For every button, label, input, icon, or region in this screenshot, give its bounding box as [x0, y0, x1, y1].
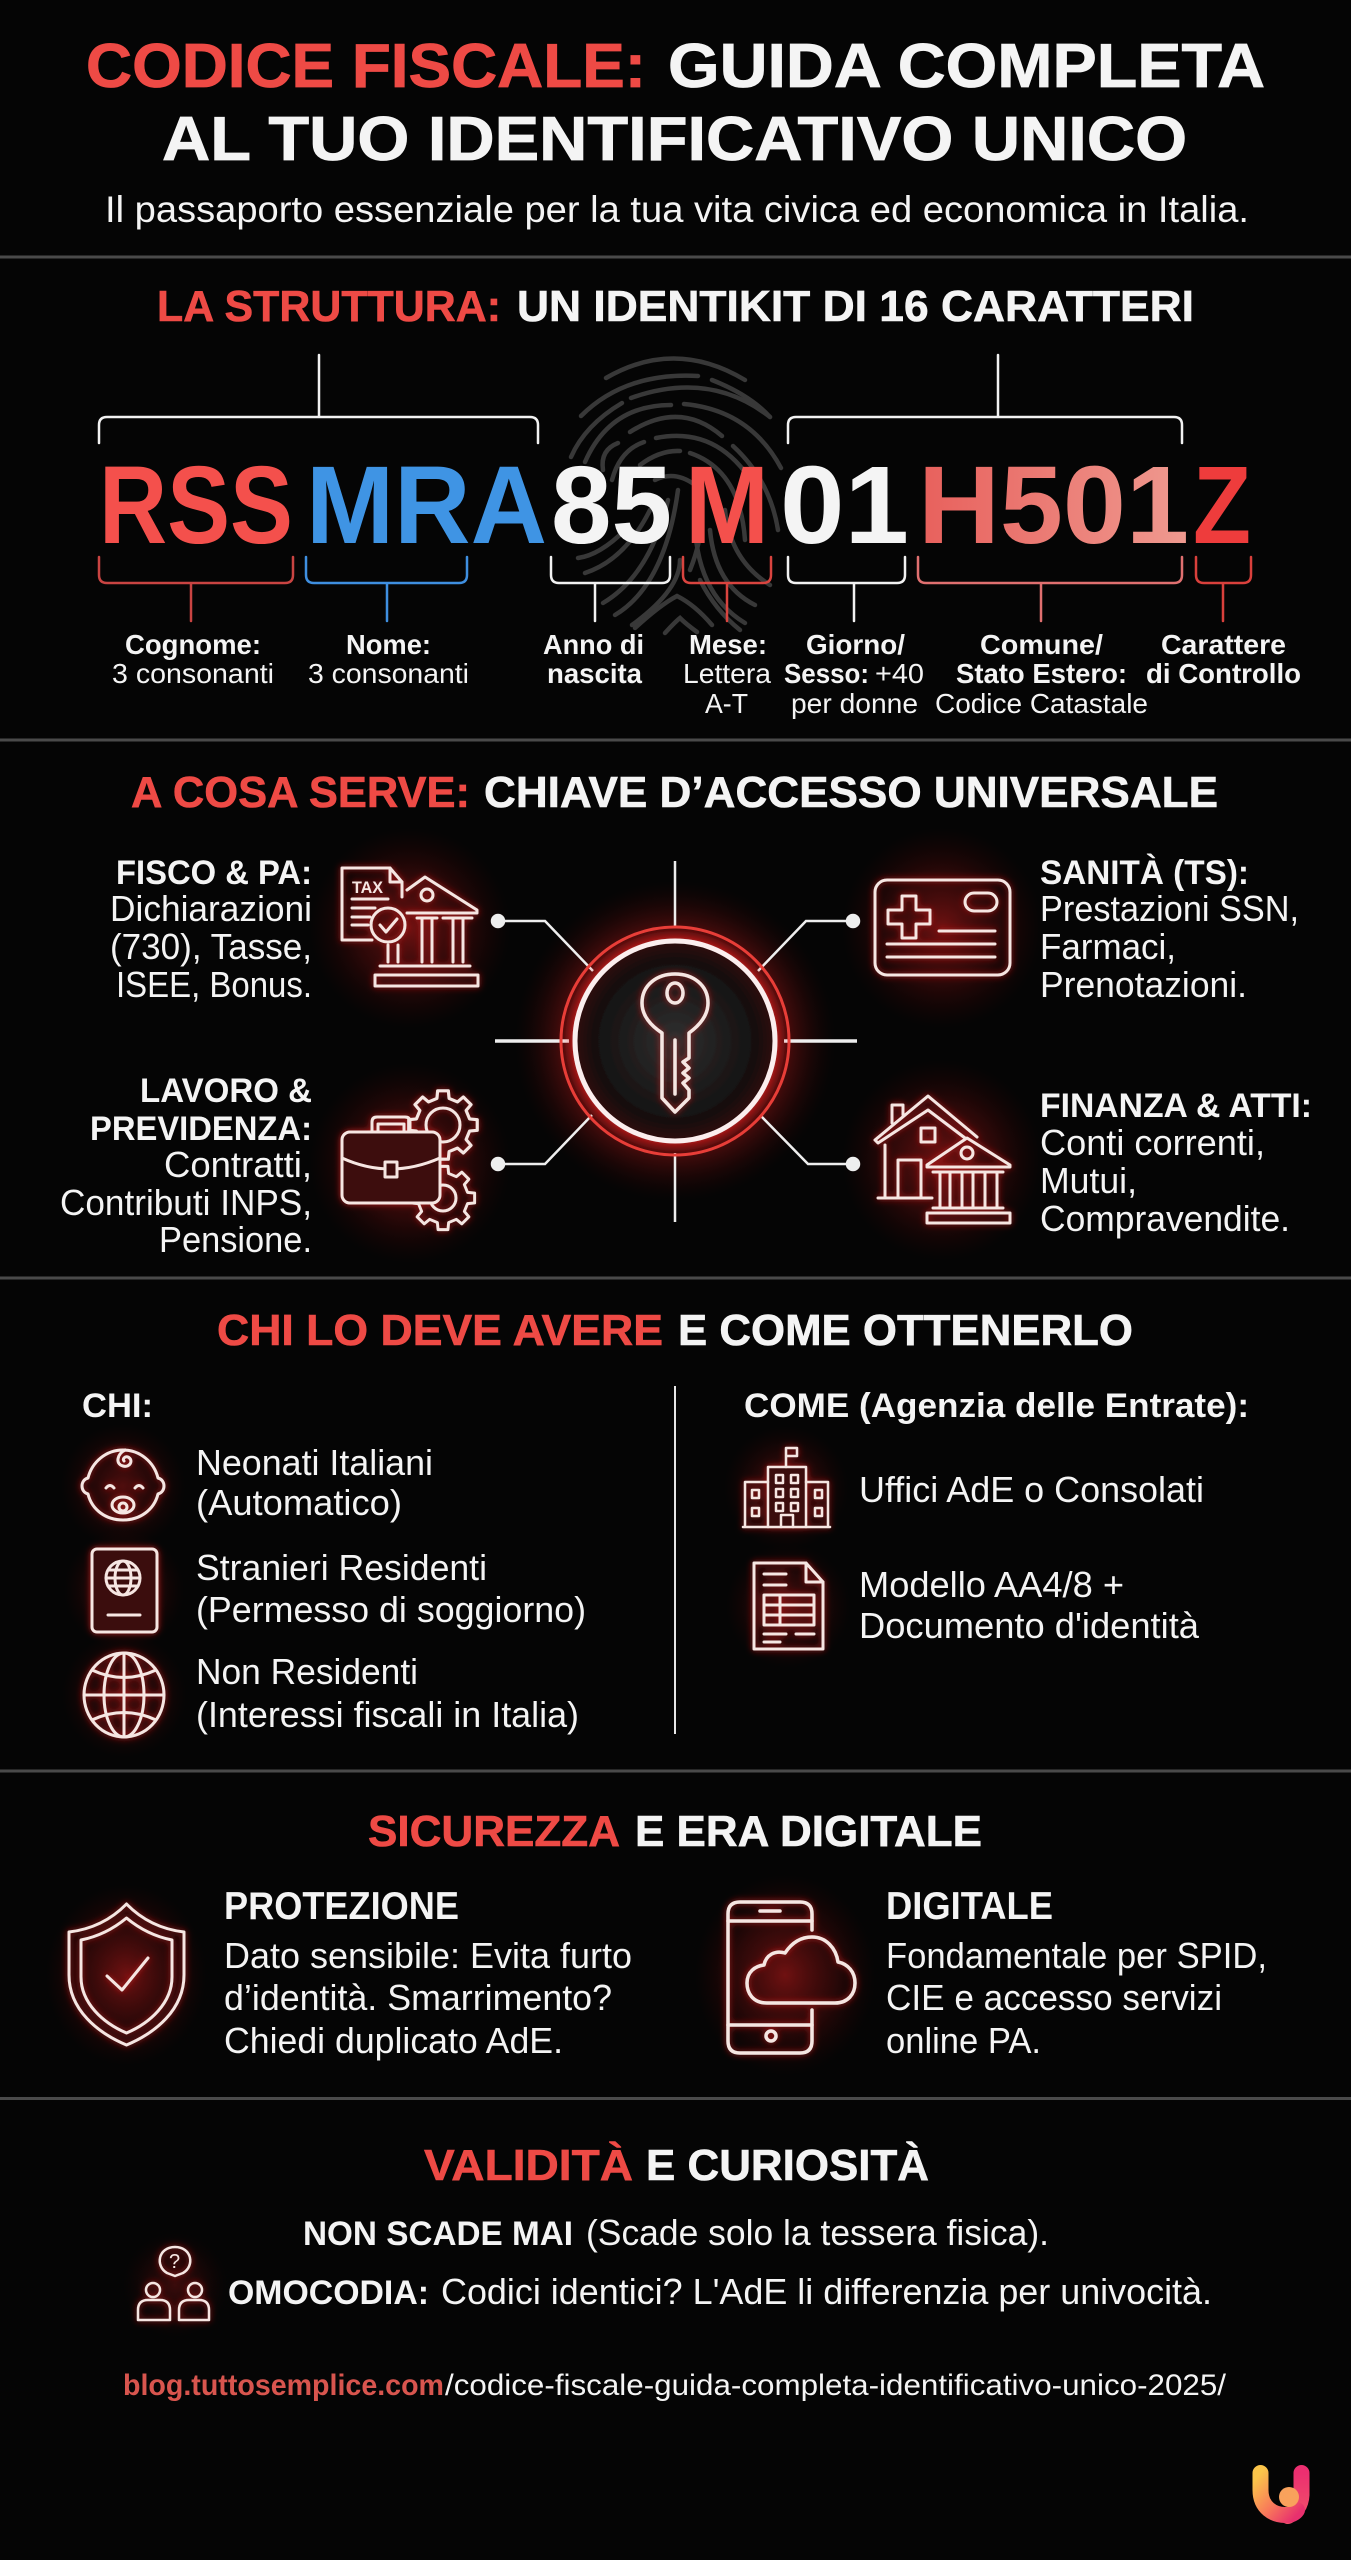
text: neonati: (Automatico)	[196, 1482, 402, 1523]
label: giorno sesso: +40	[875, 658, 924, 689]
text: modello	[859, 1564, 1200, 1646]
label: nome	[308, 629, 469, 689]
label: mese: Mese:	[689, 629, 767, 660]
text: finanza e atti: FINANZA & ATTI:	[1040, 1087, 1312, 1125]
subtitle: Il passaporto essenziale per la tua vita civica ed economica in Italia.	[105, 189, 1249, 230]
text: lavoro e previdenza: PREVIDENZA:	[90, 1110, 312, 1148]
text: sanita: Prestazioni SSN,	[1040, 888, 1299, 929]
text: sanita: SANITÀ (TS):	[1040, 854, 1249, 892]
label: controllo: di Controllo	[1146, 658, 1301, 689]
icon glow backgrounds	[310, 828, 1042, 1263]
heading: sicurezza: SICUREZZA	[368, 1807, 620, 1856]
text: stranieri: (Permesso di soggiorno)	[196, 1589, 586, 1630]
bracket: anno	[551, 557, 670, 621]
outer red ring	[561, 927, 789, 1155]
bracket: controllo	[1196, 557, 1251, 621]
label: comune: Stato Estero:	[956, 658, 1127, 689]
text: digitale: Fondamentale per SPID,	[886, 1935, 1267, 1976]
label: mese: A-T	[705, 688, 748, 719]
code string	[99, 444, 1251, 567]
text: digitale	[886, 1885, 1267, 2061]
text: omocodia: Codici identici? L'AdE li differenzia per univocità.	[441, 2271, 1212, 2312]
text: omocodia: OMOCODIA:	[228, 2274, 429, 2312]
code string: MRA	[306, 444, 547, 567]
label: controllo: Carattere	[1161, 629, 1286, 660]
title	[86, 32, 1265, 174]
text: source link: blog.tuttosemplice.com	[123, 2369, 444, 2402]
connectors	[492, 861, 859, 1222]
text: protezione	[224, 1885, 632, 2061]
bracket: comune	[918, 557, 1182, 621]
heading: validita: VALIDITÀ	[424, 2140, 633, 2190]
label: anno: nascita	[547, 658, 642, 689]
code string: M	[685, 444, 769, 567]
icon: phone cloud	[695, 1875, 875, 2075]
top bracket: cognome nome	[99, 355, 538, 443]
icon: shield	[46, 1885, 206, 2065]
code string: Z	[1193, 444, 1251, 567]
title: AL TUO IDENTIFICATIVO UNICO	[162, 105, 1187, 174]
text: fisco e pa: ISEE, Bonus.	[116, 964, 312, 1005]
code string: RSS	[99, 444, 293, 567]
text: uffici: Uffici AdE o Consolati	[859, 1469, 1204, 1510]
text: modello: Documento d'identità	[859, 1605, 1200, 1646]
text: fisco e pa: FISCO & PA:	[116, 854, 312, 892]
panel: a cosa serve	[60, 768, 1312, 1263]
text: finanza e atti: Conti correnti,	[1040, 1122, 1265, 1163]
code string: 85	[551, 444, 672, 567]
text: non scade mai: (Scade solo la tessera fisica).	[586, 2212, 1049, 2253]
label: comune: Codice Catastale	[935, 688, 1148, 719]
icon: omocodia	[123, 2233, 227, 2337]
text: protezione: d’identità. Smarrimento?	[224, 1977, 612, 2018]
bracket: nome	[306, 557, 467, 621]
heading: la struttura	[157, 282, 1194, 331]
text: stranieri: Stranieri Residenti	[196, 1547, 487, 1588]
icon: tax and bank	[342, 868, 478, 986]
title: GUIDA COMPLETA	[668, 32, 1265, 101]
text: digitale: CIE e accesso servizi	[886, 1977, 1222, 2018]
graphic: central key	[492, 861, 859, 1222]
text: source link: /codice-fiscale-guida-completa-identificativo-unico-2025/	[445, 2369, 1227, 2402]
icon: baby	[82, 1450, 164, 1520]
heading: sicurezza	[368, 1807, 982, 1856]
heading: sicurezza: E ERA DIGITALE	[635, 1807, 982, 1856]
label: mese: Lettera	[683, 658, 771, 689]
label: cognome: Cognome:	[125, 629, 261, 660]
code string: H501	[918, 444, 1189, 567]
heading: la struttura: LA STRUTTURA:	[157, 282, 501, 331]
panel: sicurezza	[46, 1807, 1267, 2075]
label: comune	[935, 629, 1148, 719]
panel: struttura	[99, 282, 1301, 719]
panel: validita	[123, 2140, 1227, 2402]
text: neonati: Neonati Italiani	[196, 1442, 433, 1483]
logo	[1260, 2473, 1302, 2516]
label: giorno sesso: per donne	[791, 688, 918, 719]
heading: come: COME (Agenzia delle Entrate):	[744, 1387, 1249, 1425]
label: giorno sesso	[784, 629, 924, 719]
label: mese	[683, 629, 771, 719]
text: modello: Modello AA4/8 +	[859, 1564, 1124, 1605]
text: fisco e pa	[110, 854, 312, 1005]
text: lavoro e previdenza: Pensione.	[159, 1219, 312, 1260]
text: lavoro e previdenza: Contratti,	[164, 1144, 312, 1185]
text: lavoro e previdenza: LAVORO &	[140, 1072, 312, 1110]
heading: chi: CHI:	[82, 1387, 153, 1425]
heading: a cosa serve: A COSA SERVE:	[131, 768, 470, 817]
icon: tax and bank: TAX	[352, 878, 384, 897]
text: digitale: DIGITALE	[886, 1885, 1053, 1928]
heading: la struttura: UN IDENTIKIT DI 16 CARATTERI	[517, 282, 1194, 331]
heading: a cosa serve: CHIAVE D’ACCESSO UNIVERSALE	[484, 768, 1218, 817]
text: protezione: Chiedi duplicato AdE.	[224, 2020, 563, 2061]
heading: chi lo deve avere: CHI LO DEVE AVERE	[217, 1306, 663, 1355]
text: neonati	[196, 1442, 433, 1523]
text: fisco e pa: (730), Tasse,	[110, 926, 312, 967]
label: comune: Comune/	[980, 629, 1103, 660]
bracket: cognome	[99, 557, 293, 621]
text: protezione: Dato sensibile: Evita furto	[224, 1935, 632, 1976]
text: non scade mai: NON SCADE MAI	[303, 2215, 573, 2253]
bracket: mese	[683, 557, 771, 621]
text: stranieri	[196, 1547, 586, 1630]
text: non residenti: Non Residenti	[196, 1651, 418, 1692]
icon: omocodia: ?	[169, 2251, 180, 2273]
panel: chi e come	[61, 1306, 1249, 1757]
code string: 01	[780, 444, 909, 567]
text: sanita	[1040, 854, 1299, 1005]
icon: key	[642, 974, 708, 1112]
icon: briefcase and gears	[342, 1091, 477, 1230]
label: nome: 3 consonanti	[308, 658, 469, 689]
heading: validita: E CURIOSITÀ	[646, 2140, 929, 2190]
text: non residenti	[196, 1651, 579, 1735]
heading: chi lo deve avere: E COME OTTENERLO	[678, 1306, 1133, 1355]
label: anno: Anno di	[543, 629, 644, 660]
icon: fingerprint	[571, 358, 781, 633]
icon: passport	[92, 1549, 157, 1632]
text: protezione: PROTEZIONE	[224, 1885, 459, 1928]
icon: globe	[84, 1653, 164, 1737]
title: CODICE FISCALE:	[86, 32, 646, 101]
icon glows	[61, 1424, 850, 1757]
top bracket: data comune	[788, 355, 1182, 443]
label: anno	[543, 629, 644, 689]
icon: document	[754, 1563, 823, 1649]
text: sanita: Farmaci,	[1040, 926, 1176, 967]
heading: validita	[424, 2140, 929, 2190]
text: lavoro e previdenza	[60, 1072, 312, 1260]
text: finanza e atti: Mutui,	[1040, 1160, 1137, 1201]
text: source link	[123, 2369, 1227, 2402]
text: finanza e atti: Compravendite.	[1040, 1198, 1290, 1239]
text: fisco e pa: Dichiarazioni	[110, 888, 312, 929]
icon: house and bank	[875, 1096, 1010, 1223]
label: cognome	[112, 629, 274, 689]
icon: health card	[875, 880, 1010, 975]
text: non scade mai	[303, 2212, 1049, 2253]
label: cognome: 3 consonanti	[112, 658, 274, 689]
heading: chi lo deve avere	[217, 1306, 1133, 1355]
key glow	[515, 881, 835, 1201]
text: lavoro e previdenza: Contributi INPS,	[60, 1182, 312, 1223]
icon: office building	[743, 1448, 830, 1527]
label: giorno sesso: Sesso:	[784, 658, 869, 689]
heading: a cosa serve	[131, 768, 1218, 817]
text: sanita: Prenotazioni.	[1040, 964, 1247, 1005]
label: giorno sesso: Giorno/	[806, 629, 905, 660]
text: digitale: online PA.	[886, 2020, 1041, 2061]
label: controllo	[1146, 629, 1301, 689]
white ring	[575, 941, 775, 1141]
text: non residenti: (Interessi fiscali in Italia)	[196, 1694, 579, 1735]
label: nome: Nome:	[346, 629, 431, 660]
bracket: giorno	[788, 557, 905, 621]
text: finanza e atti	[1040, 1087, 1312, 1239]
